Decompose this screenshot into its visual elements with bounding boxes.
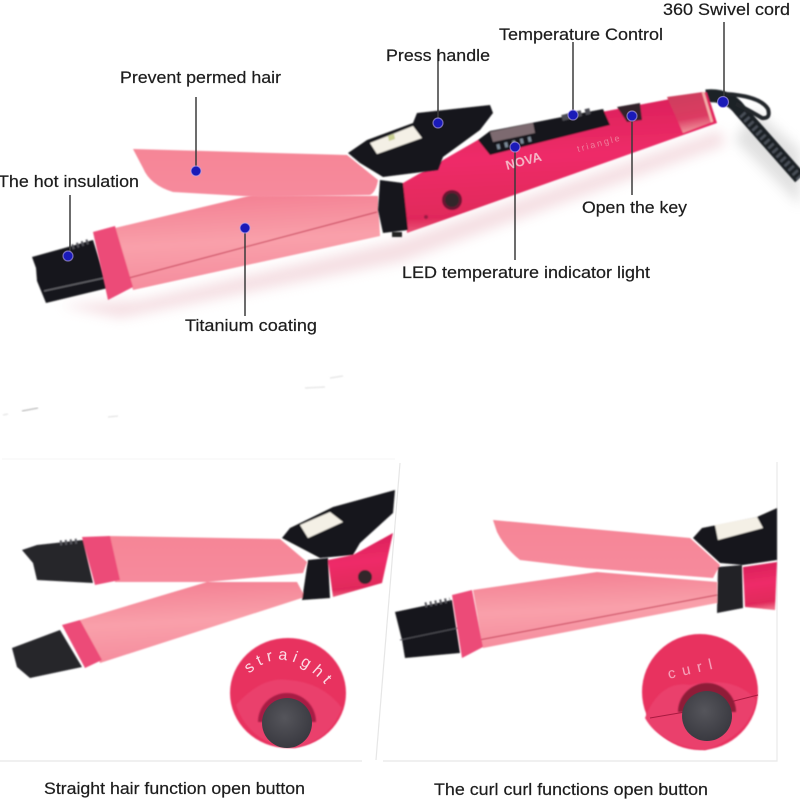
panel: main product diagram	[0, 1, 800, 335]
callout: open the key: Open the key	[582, 199, 688, 217]
product shadow	[60, 110, 800, 318]
brand name: NOVA	[504, 149, 544, 173]
styler in curl mode	[395, 508, 777, 658]
caption: straight: Straight hair function open button	[44, 780, 305, 798]
callout: 360 swivel cord: 360 Swivel cord	[663, 1, 790, 19]
caption: curl: The curl curl functions open button	[434, 781, 708, 799]
button closeup: straight: straight	[245, 650, 332, 684]
panel: curl function	[383, 462, 777, 799]
upper plate	[133, 149, 378, 197]
callout: titanium coating	[185, 223, 317, 335]
panel frame	[0, 463, 400, 761]
callout: press handle	[386, 47, 490, 128]
button closeup: curl	[642, 634, 758, 750]
callout: open the key	[582, 111, 688, 217]
callout: LED temperature indicator light	[402, 142, 650, 282]
model name: triangle	[576, 132, 622, 154]
press handle	[348, 105, 493, 177]
handle body	[378, 92, 717, 237]
styler in straight mode	[12, 490, 395, 678]
button closeup: straight	[228, 636, 348, 750]
panel: straight function	[0, 458, 400, 798]
callout: LED temperature indicator light: LED temperature indicator light	[402, 264, 650, 282]
callout: the hot insulation	[0, 173, 139, 261]
callout: 360 swivel cord	[663, 1, 790, 108]
callout: temperature control: Temperature Control	[499, 26, 663, 44]
callout: temperature control	[499, 26, 663, 120]
callout: titanium coating: Titanium coating	[185, 317, 317, 335]
heat insulated tip	[32, 240, 108, 303]
callout: prevent permed hair	[120, 69, 282, 176]
callout: prevent permed hair: Prevent permed hair	[120, 69, 282, 87]
swivel cord	[706, 94, 800, 178]
panel frame	[383, 462, 777, 761]
button closeup: curl: curl	[666, 655, 721, 683]
callout: the hot insulation: The hot insulation	[0, 173, 139, 191]
titanium barrel	[93, 195, 380, 300]
callout: press handle: Press handle	[386, 47, 490, 65]
